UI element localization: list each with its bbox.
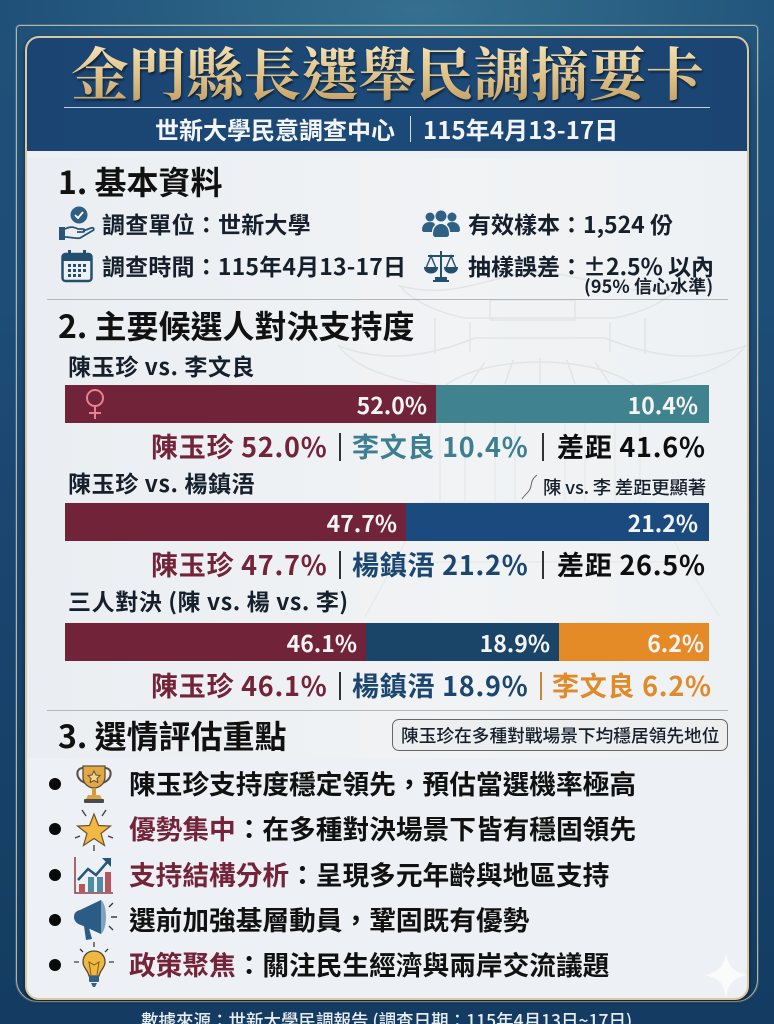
- result row: 楊鎮浯 21.2%: [352, 544, 528, 583]
- label: 陳玉珍 vs. 李文良: [68, 348, 255, 382]
- stacked bar: [65, 623, 709, 661]
- stacked bar: [65, 385, 709, 423]
- icon: star: [74, 810, 114, 851]
- text: 陳玉珍支持度穩定領先，預估當選機率極高: [129, 763, 636, 802]
- stacked bar: 10.4%: [628, 387, 698, 421]
- annotation: 陳 vs. 李 差距更顯著: [543, 474, 706, 500]
- result row: 楊鎮浯 18.9%: [352, 665, 528, 704]
- text: 選前加強基層動員，鞏固既有優勢: [129, 899, 529, 938]
- heading 1: 1. 基本資料: [58, 158, 223, 204]
- result row: [151, 426, 706, 465]
- matchup 1: [65, 348, 709, 465]
- heading 3: 3. 選情評估重點: [58, 712, 287, 758]
- panel: assessment: [49, 712, 728, 987]
- text: confidence level: (95% 信心水準): [584, 273, 713, 299]
- icon: people: [422, 210, 460, 237]
- panel: matchup support: [58, 302, 712, 704]
- icon: sparkle: [706, 954, 746, 996]
- stacked bar: 46.1%: [287, 625, 357, 659]
- icon: growth chart: [74, 857, 113, 894]
- subtitle: 115年4月13-17日: [423, 111, 618, 146]
- stacked bar: 21.2%: [628, 505, 698, 539]
- bullet 5: [49, 942, 609, 987]
- title: 金門縣長選舉民調摘要卡: [71, 30, 704, 112]
- result row: 陳玉珍 47.7%: [151, 544, 327, 583]
- result row: 李文良 6.2%: [552, 665, 712, 704]
- icon: light bulb: [74, 942, 114, 987]
- bullet 1: [49, 763, 636, 803]
- result row: 李文良 10.4%: [352, 426, 528, 465]
- stacked bar: 6.2%: [647, 625, 704, 659]
- header band: [27, 38, 747, 151]
- matchup 2: [65, 465, 709, 583]
- stacked bar: 52.0%: [357, 387, 427, 421]
- matchup 3: [65, 583, 712, 704]
- result row: 陳玉珍 46.1%: [151, 665, 327, 704]
- text: survey time: 調查時間：115年4月13-17日: [102, 248, 406, 282]
- text: margin of error: 抽樣誤差：±2.5% 以內: [468, 248, 714, 282]
- icon: hand with check: [59, 206, 95, 240]
- icon: megaphone: [74, 900, 117, 940]
- bullet 2: [49, 808, 636, 851]
- result row: [151, 544, 706, 583]
- text: 支持結構分析：呈現多元年齡與地區支持: [129, 854, 609, 893]
- subtitle: 世新大學民意調查中心: [155, 111, 395, 146]
- text: 優勢集中：在多種對決場景下皆有穩固領先: [129, 808, 636, 847]
- stacked bar: 18.9%: [480, 625, 550, 659]
- background glow: [0, 0, 774, 160]
- text: valid sample: 有效樣本：1,524 份: [468, 206, 673, 240]
- stacked bar: [65, 503, 709, 541]
- result row: 差距 41.6%: [557, 426, 706, 465]
- subtitle: [155, 111, 618, 146]
- icon: trophy: [76, 765, 112, 803]
- icon: scales: [424, 251, 458, 282]
- result row: 陳玉珍 52.0%: [151, 426, 327, 465]
- icon: female symbol: [86, 389, 104, 419]
- temple watermark: [338, 272, 746, 617]
- header rule: [64, 107, 710, 108]
- result row: [151, 665, 712, 704]
- stacked bar: 47.7%: [327, 505, 397, 539]
- icon: calendar: [61, 250, 93, 282]
- bullet 3: [49, 854, 609, 894]
- text: 政策聚焦：關注民生經濟與兩岸交流議題: [129, 944, 609, 983]
- panel: basic info: [58, 158, 714, 299]
- heading 2: 2. 主要候選人對決支持度: [58, 302, 415, 348]
- label: 三人對決 (陳 vs. 楊 vs. 李): [68, 583, 349, 617]
- label: 陳玉珍 vs. 楊鎮浯: [68, 465, 255, 499]
- bullet 4: [49, 899, 529, 940]
- result row: 差距 26.5%: [557, 544, 706, 583]
- callout: 陳玉珍在多種對戰場景下均穩居領先地位: [401, 722, 719, 748]
- text: survey unit: 調查單位：世新大學: [102, 206, 311, 240]
